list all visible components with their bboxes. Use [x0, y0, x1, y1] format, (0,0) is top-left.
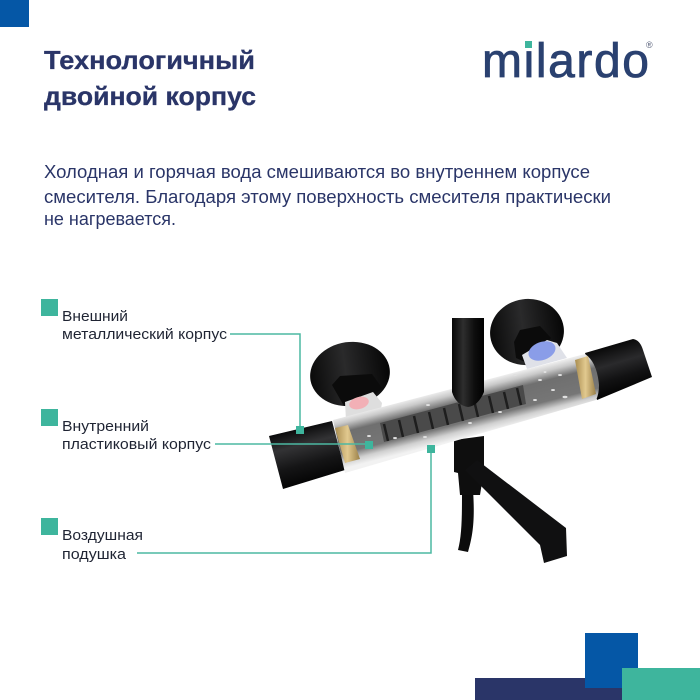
title: Технологичный: [44, 45, 255, 75]
callout: inner plastic body: [41, 409, 373, 453]
right knob: [486, 294, 568, 370]
gold ring left: [335, 425, 360, 463]
water bubbles: [367, 371, 568, 439]
right knob neck: [522, 340, 567, 369]
logo: milardo: milardo: [482, 35, 649, 88]
callout: air cushion: подушка: [62, 546, 127, 563]
left knob nut: [332, 374, 382, 406]
logo accent square: [525, 41, 532, 48]
inner ribbed core: [380, 385, 526, 442]
callout: air cushion: [41, 445, 435, 563]
left metal body: [269, 421, 345, 489]
corner accent: top left: [0, 0, 29, 27]
hot water insert: [348, 395, 370, 411]
title: двойной корпус: [44, 81, 256, 111]
registered mark: ®: [646, 40, 653, 50]
callout: inner plastic body: пластиковый корпус: [62, 436, 212, 453]
title: [44, 45, 256, 111]
corner accent: bottom right: [475, 633, 700, 700]
description text: Холодная и горячая вода смешиваются во внутреннем корпусе: [44, 162, 590, 182]
left knob: [306, 337, 394, 420]
callout: outer metal body: Внешний: [62, 308, 128, 325]
left knob neck: [345, 392, 382, 420]
callout: outer metal body: [41, 299, 304, 434]
gold ring right: [575, 356, 596, 399]
description text: смесителя. Благодаря этому поверхность смесителя практически: [44, 187, 611, 207]
description text: [44, 162, 611, 229]
faucet illustration: [269, 294, 652, 563]
description text: не нагревается.: [44, 209, 176, 229]
shower pipe: [452, 318, 484, 407]
lower body and spout: [454, 436, 567, 563]
callout: outer metal body: металлический корпус: [62, 326, 228, 343]
right knob nut: [514, 326, 551, 362]
transparent inner tube: [333, 354, 599, 473]
callout: air cushion: Воздушная: [62, 527, 143, 544]
cold water insert: [526, 338, 558, 364]
callout: inner plastic body: Внутренний: [62, 418, 149, 435]
right metal body: [585, 339, 652, 400]
